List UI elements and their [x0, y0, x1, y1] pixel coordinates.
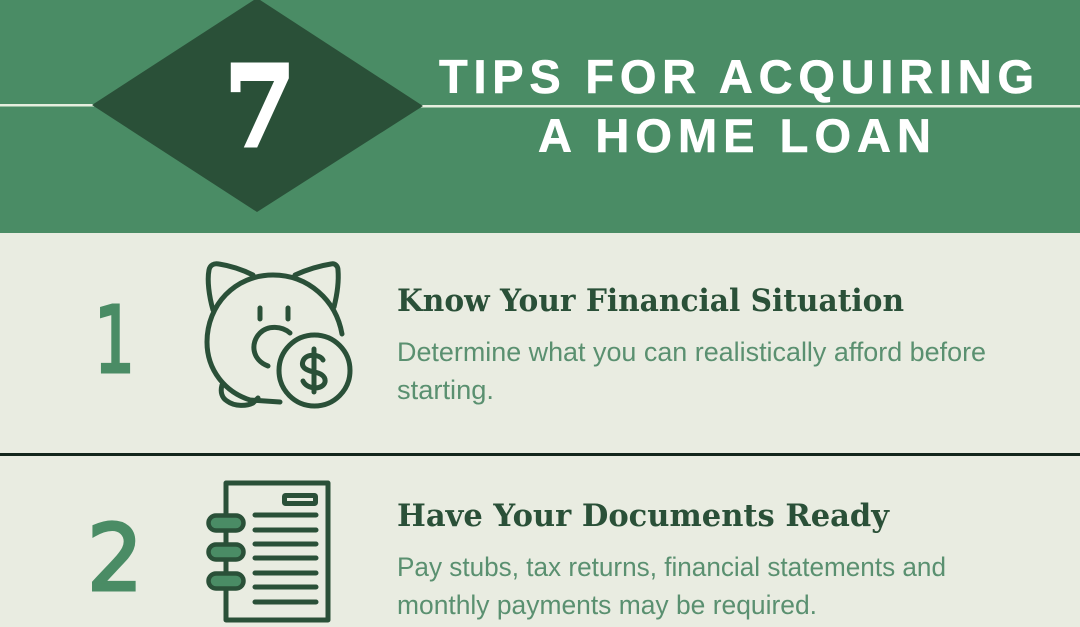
- divider: [0, 453, 1080, 456]
- icon: document with binder rings: [208, 483, 328, 620]
- title: A HOME LOAN: [538, 109, 931, 162]
- title: TIPS FOR ACQUIRING: [439, 50, 1034, 103]
- tip 1 description: starting.: [397, 375, 494, 405]
- icon: piggy bank with coin: [207, 264, 350, 406]
- number 1: 1: [94, 287, 135, 394]
- tip 2 description: Pay stubs, tax returns, financial statements and: [397, 552, 946, 582]
- title: [439, 50, 1034, 162]
- header banner: [0, 0, 1080, 233]
- tip 1 description: [397, 337, 986, 405]
- tip 2 description: [397, 552, 946, 620]
- tip 1 heading: Know Your Financial Situation: [397, 283, 904, 319]
- number 2: 2: [87, 505, 143, 612]
- diamond badge with number 7: [92, 0, 423, 212]
- tip 2 heading: Have Your Documents Ready: [397, 498, 890, 534]
- diamond badge with number 7: 7: [224, 42, 296, 173]
- tip 1 description: Determine what you can realistically afford before: [397, 337, 986, 367]
- tip 2 description: monthly payments may be required.: [397, 590, 817, 620]
